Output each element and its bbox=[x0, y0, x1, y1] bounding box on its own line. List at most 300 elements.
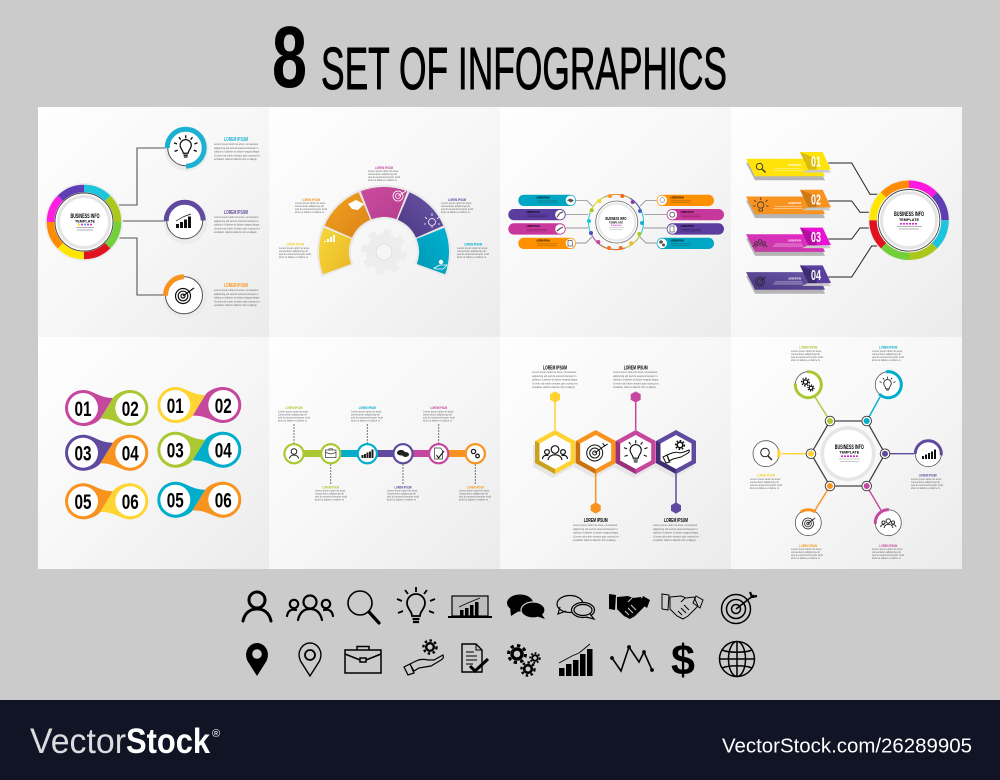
icon: gears bbox=[802, 378, 814, 391]
logo: ® bbox=[212, 728, 220, 740]
label 3: sed do eiusmod tempor incid bbox=[351, 416, 384, 420]
label: purple: sed do eiusmod tempor incid bbox=[441, 208, 474, 211]
label 5 bbox=[423, 405, 456, 422]
label: search: sed do eiusmod tempor incid bbox=[750, 484, 783, 487]
label: teal: Lorem ipsum dolor sit amet, bbox=[457, 247, 488, 250]
label: orange: Lorem ipsum dolor sit amet, bbox=[295, 202, 326, 205]
label: search: idunt ut labore et dolore m bbox=[750, 487, 779, 490]
pill 4 right: LOREM IPSUM bbox=[670, 238, 684, 242]
link 01-02 alternate bbox=[157, 387, 241, 423]
label: teal: sed do eiusmod tempor incid bbox=[457, 253, 490, 256]
label 6: idunt ut labore et dolore m bbox=[459, 498, 488, 502]
node: people bbox=[874, 509, 902, 537]
label: orange: idunt ut labore et dolore m bbox=[295, 211, 324, 214]
tag 01 bbox=[746, 152, 831, 180]
tag 01: LOREM IPSUM bbox=[788, 163, 801, 167]
label: gears: LOREM IPSUM bbox=[799, 344, 818, 350]
heading and text: growth: Lorem ipsum dolor sit amet, consectetur bbox=[214, 216, 259, 219]
label 4: consectetur adipiscing elit bbox=[387, 492, 416, 496]
label: top right: ercitation ullamco laboris nisi ut aliquip bbox=[613, 386, 656, 389]
label: bulb: idunt ut labore et dolore m bbox=[872, 359, 901, 362]
center label bbox=[894, 212, 924, 229]
pill 4 left: LOREM IPSUM bbox=[536, 238, 550, 242]
label 1: idunt ut labore et dolore m bbox=[278, 420, 307, 422]
node: bars bbox=[915, 441, 941, 467]
center label: TEMPLATE bbox=[609, 220, 623, 224]
label 5: LOREM IPSUM bbox=[430, 405, 448, 410]
label: teal bbox=[457, 242, 490, 259]
label: yellow: Lorem ipsum dolor sit amet, bbox=[279, 247, 310, 250]
label 4 bbox=[387, 484, 420, 502]
label 2: idunt ut labore et dolore m bbox=[315, 498, 344, 502]
tag 04: LOREM IPSUM bbox=[788, 276, 801, 280]
center label: BUSINESS INFO bbox=[606, 216, 627, 221]
label 1: sed do eiusmod tempor incid bbox=[278, 416, 311, 420]
hexagon soft shadows bbox=[533, 434, 694, 478]
spokes and node dots bbox=[782, 397, 914, 510]
heading and text: growth: ercitation ullamco laboris nisi ut aliquip bbox=[214, 231, 257, 234]
label: bottom right: LOREM IPSUM bbox=[664, 518, 688, 524]
label 1: Lorem ipsum dolor sit amet, bbox=[278, 410, 309, 414]
heading and text: idea: Ut enim ad minim veniam quis nostrud ex bbox=[214, 154, 261, 157]
label: people: idunt ut labore et dolore m bbox=[872, 557, 901, 560]
logo: Vector bbox=[30, 722, 126, 761]
label 5: idunt ut labore et dolore m bbox=[423, 420, 452, 422]
node: document bbox=[428, 443, 449, 464]
panel: half ring bbox=[269, 107, 500, 337]
heading and text: growth: Ut enim ad minim veniam quis nostrud ex bbox=[214, 227, 261, 230]
label: bottom right: Ut enim ad minim veniam quis nostrud ex bbox=[653, 535, 700, 538]
label 2: Lorem ipsum dolor sit amet, bbox=[315, 490, 346, 492]
icon: zigzag bbox=[610, 645, 654, 672]
panel: pills around ring bbox=[500, 107, 731, 337]
label: gears: consectetur adipiscing elit bbox=[791, 353, 820, 356]
label: top left bbox=[532, 366, 579, 389]
label: people bbox=[872, 543, 905, 560]
tag 03: LOREM IPSUM bbox=[788, 239, 801, 243]
label: target: idunt ut labore et dolore m bbox=[791, 557, 820, 560]
icon: search bbox=[761, 448, 772, 460]
panel: circle with three branches bbox=[38, 107, 269, 337]
link 01-02: 02 bbox=[122, 397, 139, 421]
icon: group bbox=[287, 596, 333, 620]
heading and text: idea: LOREM IPSUM bbox=[224, 137, 248, 143]
panel: hexagon chain bbox=[500, 337, 731, 569]
label: top right: cididunt ut labore et dolore magna aliqua bbox=[613, 379, 659, 382]
icon: bulb bbox=[397, 587, 435, 622]
label: bars: sed do eiusmod tempor incid bbox=[911, 484, 944, 487]
link 01-02 alternate: 01 bbox=[167, 394, 184, 418]
label: bars bbox=[911, 472, 944, 490]
link 05-06: 06 bbox=[122, 490, 139, 514]
label: bulb: sed do eiusmod tempor incid bbox=[872, 356, 905, 359]
label 3: Lorem ipsum dolor sit amet, bbox=[351, 410, 382, 414]
icon: search bbox=[348, 591, 379, 623]
icon: handshake solid bbox=[609, 594, 650, 619]
title: SET OF INFOGRAPHICS bbox=[321, 36, 727, 102]
connectors bbox=[566, 200, 667, 243]
heading and text: target: Ut enim ad minim veniam quis nostrud ex bbox=[214, 300, 261, 303]
label: top left: ercitation ullamco laboris nisi ut aliquip bbox=[532, 386, 575, 389]
node: gears bbox=[465, 443, 486, 464]
label 4: sed do eiusmod tempor incid bbox=[387, 496, 420, 498]
label: bottom right bbox=[653, 518, 700, 542]
stems and end hexagons bbox=[550, 391, 681, 514]
label: top right bbox=[613, 366, 660, 389]
link 03-04 bbox=[65, 435, 148, 471]
segment: teal bbox=[416, 228, 449, 274]
heading and text: idea bbox=[214, 137, 261, 161]
icon: bulb bbox=[880, 377, 895, 390]
halo behind ring bbox=[317, 185, 451, 277]
label 3: idunt ut labore et dolore m bbox=[351, 420, 380, 422]
heading and text: growth: cididunt ut labore et dolore magna aliqua bbox=[214, 224, 260, 227]
label: bulb: consectetur adipiscing elit bbox=[872, 353, 901, 356]
label: bulb bbox=[872, 344, 905, 362]
label: search: consectetur adipiscing elit bbox=[750, 481, 779, 484]
label: orange: consectetur adipiscing elit bbox=[295, 205, 324, 208]
pill 4 left bbox=[518, 238, 576, 249]
icon: gears bbox=[508, 646, 540, 676]
segment: magenta bbox=[361, 187, 407, 219]
center label: BUSINESS INFO bbox=[70, 214, 100, 220]
icon: hand and gear bbox=[663, 441, 689, 463]
label: bottom right: Lorem ipsum dolor sit amet, consectetur bbox=[653, 524, 698, 527]
logo: Stock bbox=[126, 722, 210, 761]
heading and text: growth: LOREM IPSUM bbox=[224, 210, 248, 216]
ring with dots bbox=[587, 194, 644, 250]
label: bottom right: ercitation ullamco laboris nisi ut aliquip bbox=[653, 539, 696, 542]
title bbox=[272, 9, 727, 106]
label 3: consectetur adipiscing elit bbox=[351, 414, 380, 416]
label: orange: LOREM IPSUM bbox=[302, 197, 320, 202]
node: growth bbox=[164, 200, 208, 244]
link 05-06 bbox=[65, 483, 148, 519]
pill 3 left: LOREM IPSUM bbox=[526, 224, 540, 228]
label: bulb: Lorem ipsum dolor sit amet, bbox=[872, 350, 903, 353]
label: bottom left: LOREM IPSUM bbox=[584, 518, 608, 524]
icon: target bbox=[756, 276, 766, 286]
panel: numbered links bbox=[38, 337, 269, 569]
node: idea bbox=[164, 127, 208, 171]
label: bottom left: Ut enim ad minim veniam quis nostrud ex bbox=[573, 535, 620, 538]
icon set bbox=[243, 587, 757, 684]
label 3: LOREM IPSUM bbox=[359, 405, 376, 410]
node: person bbox=[283, 443, 305, 464]
icon: handshake outline bbox=[662, 594, 703, 619]
icon: people bbox=[753, 240, 767, 248]
label: yellow: LOREM IPSUM bbox=[286, 242, 304, 246]
label 4: LOREM IPSUM bbox=[394, 484, 412, 490]
label: purple: consectetur adipiscing elit bbox=[441, 205, 470, 208]
label: purple bbox=[441, 197, 474, 214]
tag 03 bbox=[746, 228, 831, 256]
label 1: LOREM IPSUM bbox=[286, 405, 303, 410]
center label bbox=[835, 445, 864, 462]
heading and text: target bbox=[214, 283, 261, 307]
logo bbox=[30, 722, 220, 761]
icon: target bbox=[587, 443, 608, 461]
link 05-06 alternate bbox=[157, 482, 241, 518]
heading and text: idea: Lorem ipsum dolor sit amet, consectetur bbox=[214, 143, 259, 146]
hexagon: target bbox=[576, 430, 616, 474]
pill 2 right bbox=[667, 209, 724, 220]
label: orange bbox=[295, 197, 328, 214]
icon: laptop chart bbox=[448, 596, 492, 617]
label: top left: adipiscing elit sed do eiusmod tempor in bbox=[532, 375, 577, 378]
label: top right: Ut enim ad minim veniam quis nostrud ex bbox=[613, 382, 660, 385]
panel: timeline bbox=[269, 337, 500, 569]
label: bottom left bbox=[573, 518, 620, 542]
label: bars: Lorem ipsum dolor sit amet, bbox=[911, 478, 942, 481]
heading and text: target: cididunt ut labore et dolore magna aliqua bbox=[214, 297, 260, 300]
connector lines bbox=[118, 148, 165, 295]
label 6 bbox=[459, 484, 492, 502]
label 6: sed do eiusmod tempor incid bbox=[459, 496, 492, 498]
label 5: consectetur adipiscing elit bbox=[423, 414, 452, 416]
label: target: Lorem ipsum dolor sit amet, bbox=[791, 548, 822, 551]
label 6: LOREM IPSUM bbox=[467, 484, 484, 490]
label: top left: Lorem ipsum dolor sit amet, consectetur bbox=[532, 371, 577, 374]
pill 1 left: LOREM IPSUM bbox=[536, 196, 550, 200]
heading and text: target: LOREM IPSUM bbox=[224, 283, 248, 289]
heading and text: idea: adipiscing elit sed do eiusmod tempor in bbox=[214, 147, 259, 150]
label 2: LOREM IPSUM bbox=[322, 484, 340, 490]
heading and text: growth bbox=[214, 210, 261, 234]
icon: chat outline bbox=[557, 596, 594, 619]
label: orange: sed do eiusmod tempor incid bbox=[295, 208, 328, 211]
label 5: Lorem ipsum dolor sit amet, bbox=[423, 410, 454, 414]
label: target: sed do eiusmod tempor incid bbox=[791, 554, 824, 557]
label: top right: adipiscing elit sed do eiusmod tempor in bbox=[613, 375, 658, 378]
node: target bbox=[163, 274, 207, 318]
icon: target bbox=[722, 592, 757, 624]
label 1: consectetur adipiscing elit bbox=[278, 414, 307, 416]
center circle bbox=[822, 428, 874, 479]
segment: yellow bbox=[319, 228, 352, 274]
label: people: consectetur adipiscing elit bbox=[872, 551, 901, 554]
label: bottom right: cididunt ut labore et dolore magna aliqua bbox=[653, 532, 699, 535]
label: target: consectetur adipiscing elit bbox=[791, 551, 820, 554]
label: bottom left: Lorem ipsum dolor sit amet, consectetur bbox=[573, 524, 618, 527]
link 03-04 alternate: 03 bbox=[167, 439, 184, 463]
label: gears: idunt ut labore et dolore m bbox=[791, 359, 820, 362]
label: purple: Lorem ipsum dolor sit amet, bbox=[441, 202, 472, 205]
tag 04: 04 bbox=[811, 267, 821, 284]
label: top right: Lorem ipsum dolor sit amet, consectetur bbox=[613, 371, 658, 374]
panel: numbered tags to ring bbox=[731, 107, 962, 337]
heading and text: idea: ercitation ullamco laboris nisi ut aliquip bbox=[214, 158, 257, 161]
icon: bulb bbox=[753, 198, 768, 211]
label 4: idunt ut labore et dolore m bbox=[387, 498, 416, 502]
label: search: LOREM IPSUM bbox=[757, 472, 775, 478]
center label: TEMPLATE bbox=[75, 220, 96, 224]
label: bars: consectetur adipiscing elit bbox=[911, 481, 940, 484]
title: 8 bbox=[272, 9, 307, 106]
label: magenta: LOREM IPSUM bbox=[375, 165, 393, 170]
hexagon: hand and gear bbox=[656, 430, 696, 474]
heading and text: growth: adipiscing elit sed do eiusmod tempor in bbox=[214, 220, 259, 223]
node: search bbox=[750, 438, 782, 470]
node: target bbox=[790, 505, 826, 541]
icon: bulb bbox=[174, 135, 197, 157]
link 05-06: 05 bbox=[74, 490, 92, 514]
tag 02: LOREM IPSUM bbox=[788, 201, 801, 205]
icon: hand and gear bbox=[404, 640, 443, 675]
heading and text: target: Lorem ipsum dolor sit amet, consectetur bbox=[214, 289, 259, 292]
icon: person bbox=[243, 592, 271, 621]
link 01-02 alternate: 02 bbox=[215, 394, 232, 418]
label: purple: LOREM IPSUM bbox=[448, 197, 466, 202]
icon: bars bbox=[922, 450, 936, 459]
pill 1 left bbox=[518, 195, 576, 206]
tag 04 bbox=[746, 265, 831, 294]
label: bars: idunt ut labore et dolore m bbox=[911, 487, 940, 490]
icon: bars bbox=[176, 214, 191, 228]
panel: hexagon hub bbox=[731, 337, 962, 569]
center label: TEMPLATE bbox=[899, 218, 920, 222]
label: top left: LOREM IPSUM bbox=[543, 366, 567, 372]
label 5: sed do eiusmod tempor incid bbox=[423, 416, 456, 420]
pill 3 right: LOREM IPSUM bbox=[680, 224, 694, 228]
link 01-02 bbox=[65, 390, 148, 426]
segment: orange bbox=[325, 192, 370, 238]
label: bottom left: ercitation ullamco laboris nisi ut aliquip bbox=[573, 539, 616, 542]
node: bars bbox=[357, 443, 378, 464]
tag 02 bbox=[746, 190, 831, 218]
pill 4 right bbox=[657, 238, 714, 249]
center label bbox=[606, 216, 627, 230]
icon: pin outline bbox=[299, 643, 321, 676]
label: bottom left: adipiscing elit sed do eiusmod tempor in bbox=[573, 528, 618, 531]
footer band bbox=[0, 700, 1000, 780]
icon: briefcase bbox=[345, 646, 381, 673]
heading and text: idea: cididunt ut labore et dolore magna aliqua bbox=[214, 151, 260, 154]
timeline bands bbox=[294, 450, 475, 457]
connectors bbox=[828, 163, 880, 277]
node: chat bbox=[392, 443, 414, 464]
heading and text: target: ercitation ullamco laboris nisi ut aliquip bbox=[214, 304, 257, 307]
label: yellow: idunt ut labore et dolore m bbox=[279, 256, 308, 259]
label: bottom left: cididunt ut labore et dolore magna aliqua bbox=[573, 532, 619, 535]
icon: people bbox=[880, 519, 896, 528]
link 05-06 alternate: 05 bbox=[167, 489, 184, 513]
pill 1 right: LOREM IPSUM bbox=[670, 196, 684, 200]
label: teal: consectetur adipiscing elit bbox=[457, 250, 486, 253]
label: yellow bbox=[279, 242, 312, 259]
label: magenta: idunt ut labore et dolore m bbox=[368, 179, 397, 182]
icon: document check bbox=[462, 644, 488, 672]
center label bbox=[70, 214, 100, 230]
icon: pin solid bbox=[246, 643, 268, 676]
pill 2 left: LOREM IPSUM bbox=[526, 210, 540, 214]
heading and text: target: adipiscing elit sed do eiusmod tempor in bbox=[214, 293, 259, 296]
label: bars: LOREM IPSUM bbox=[919, 472, 937, 478]
label: gears bbox=[791, 344, 824, 362]
label 2: consectetur adipiscing elit bbox=[315, 492, 344, 496]
link 05-06 alternate: 06 bbox=[215, 489, 232, 513]
label 2 bbox=[315, 484, 348, 502]
hexagon: team bbox=[535, 430, 575, 474]
icon: target bbox=[176, 288, 194, 304]
label: purple: idunt ut labore et dolore m bbox=[441, 211, 470, 214]
pill 2 left bbox=[508, 209, 566, 220]
label: yellow: consectetur adipiscing elit bbox=[279, 250, 308, 253]
icon: dollar: $ bbox=[671, 636, 695, 684]
tag 03: 03 bbox=[811, 229, 821, 246]
segment icons bbox=[325, 191, 447, 269]
center label: BUSINESS INFO bbox=[894, 212, 924, 218]
multicolor ring bbox=[868, 179, 950, 261]
link 03-04: 03 bbox=[74, 442, 92, 466]
icon: search bbox=[756, 163, 766, 172]
icon: people bbox=[542, 446, 568, 460]
link 03-04 alternate: 04 bbox=[215, 439, 232, 463]
label 3 bbox=[351, 405, 384, 422]
label 1 bbox=[278, 405, 311, 422]
icon: globe bbox=[720, 642, 754, 676]
label: top left: Ut enim ad minim veniam quis nostrud ex bbox=[532, 382, 579, 385]
label: magenta: Lorem ipsum dolor sit amet, bbox=[368, 170, 399, 173]
link 01-02: 01 bbox=[74, 397, 92, 421]
icon: growth bars bbox=[559, 644, 592, 676]
label: search: Lorem ipsum dolor sit amet, bbox=[750, 478, 781, 481]
label: target bbox=[791, 543, 824, 560]
hexagon frame bbox=[811, 421, 885, 486]
icon: target bbox=[802, 518, 815, 529]
icon: gear bbox=[364, 232, 404, 272]
central multicolor ring bbox=[45, 183, 123, 261]
label: gears: sed do eiusmod tempor incid bbox=[791, 356, 824, 359]
center label: BUSINESS INFO bbox=[835, 445, 864, 451]
label: people: sed do eiusmod tempor incid bbox=[872, 554, 905, 557]
label: top right: LOREM IPSUM bbox=[624, 366, 648, 372]
dashed leaders bbox=[294, 424, 475, 484]
icon: chat solid bbox=[507, 594, 545, 619]
label 4: Lorem ipsum dolor sit amet, bbox=[387, 490, 418, 492]
pill 3 right bbox=[667, 223, 724, 235]
pill 1 right bbox=[657, 195, 714, 206]
label 6: Lorem ipsum dolor sit amet, bbox=[459, 490, 490, 492]
label: teal: LOREM IPSUM bbox=[464, 242, 482, 246]
node: bulb bbox=[873, 370, 903, 400]
hexagon: bulb bbox=[616, 430, 656, 474]
label 6: consectetur adipiscing elit bbox=[459, 492, 488, 496]
label 2: sed do eiusmod tempor incid bbox=[315, 496, 348, 498]
link 03-04 alternate bbox=[157, 432, 241, 468]
label: bottom right: adipiscing elit sed do eiusmod tempor in bbox=[653, 528, 698, 531]
icon: bulb bbox=[624, 440, 647, 462]
segment: purple bbox=[398, 192, 443, 238]
pill 2 right: LOREM IPSUM bbox=[680, 210, 694, 214]
node: gears bbox=[794, 371, 822, 399]
tag 01: 01 bbox=[811, 154, 821, 170]
label: bulb: LOREM IPSUM bbox=[879, 344, 898, 350]
label: magenta: sed do eiusmod tempor incid bbox=[368, 176, 401, 179]
tag 02: 02 bbox=[811, 191, 821, 208]
label: gears: Lorem ipsum dolor sit amet, bbox=[791, 350, 822, 353]
node: briefcase bbox=[320, 443, 341, 464]
pill 3 left bbox=[508, 223, 566, 235]
image id: VectorStock.com/26289905 bbox=[722, 736, 972, 758]
link 03-04: 04 bbox=[122, 442, 139, 466]
label: people: LOREM IPSUM bbox=[879, 543, 898, 548]
label: target: LOREM IPSUM bbox=[799, 543, 818, 548]
label: people: Lorem ipsum dolor sit amet, bbox=[872, 548, 903, 551]
label: magenta bbox=[368, 165, 401, 182]
label: magenta: consectetur adipiscing elit bbox=[368, 173, 397, 176]
label: teal: idunt ut labore et dolore m bbox=[457, 256, 486, 259]
